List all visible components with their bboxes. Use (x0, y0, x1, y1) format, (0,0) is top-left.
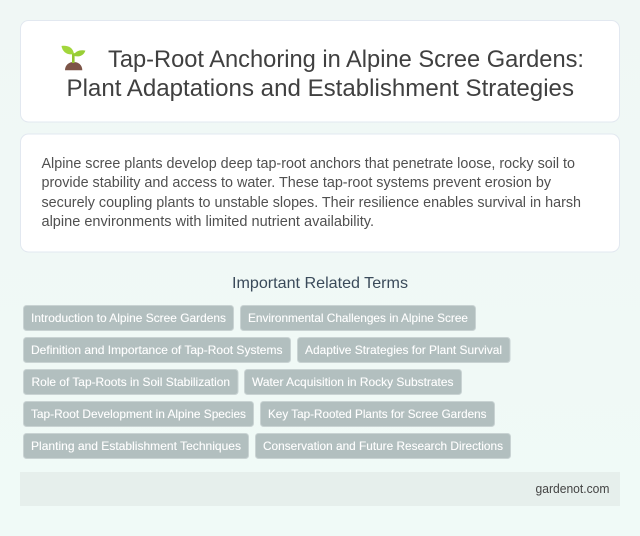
icon: seedling (62, 46, 85, 70)
chip: introduction: Introduction to Alpine Scree Gardens (31, 311, 226, 325)
chip: adaptive strategies: Adaptive Strategies for Plant Survival (305, 343, 502, 357)
chip: key plants (260, 402, 494, 426)
chip: key plants: Key Tap-Rooted Plants for Scree Gardens (268, 407, 486, 421)
chip: planting techniques (24, 434, 248, 458)
heading: important related terms: Important Related Terms (232, 275, 408, 292)
chip: environmental challenges: Environmental Challenges in Alpine Scree (248, 311, 468, 325)
chip: conservation: Conservation and Future Research Directions (263, 439, 503, 453)
chip: definition (24, 338, 290, 362)
title: Tap-Root Anchoring in Alpine Scree Gardens: (108, 46, 584, 73)
panel: description card (20, 134, 620, 252)
description text: alpine environments with limited nutrient availability. (42, 214, 374, 230)
chip: adaptive strategies (298, 338, 510, 362)
chip: water acquisition (244, 370, 462, 394)
chip: conservation (256, 434, 510, 458)
footer bar (20, 472, 620, 506)
title (66, 46, 584, 102)
chip: environmental challenges (240, 306, 476, 330)
description text: provide stability and access to water. These tap-root systems prevent erosion by (42, 175, 552, 191)
footer site name: gardenot.com (536, 481, 610, 496)
chip: water acquisition: Water Acquisition in Rocky Substrates (252, 375, 454, 389)
chip: planting techniques: Planting and Establishment Techniques (31, 439, 241, 453)
panel: related term chips (24, 306, 510, 458)
chip: soil stabilization (24, 370, 238, 394)
chip: definition: Definition and Importance of Tap-Root Systems (31, 343, 282, 357)
description text: securely coupling plants to unstable slopes. Their resilience enables survival in harsh (42, 195, 581, 211)
chip: tap-root development: Tap-Root Development in Alpine Species (31, 407, 246, 421)
chip: soil stabilization: Role of Tap-Roots in Soil Stabilization (32, 375, 230, 389)
description text: Alpine scree plants develop deep tap-root anchors that penetrate loose, rocky soil to (42, 156, 575, 172)
description text (42, 156, 581, 230)
panel: title card (20, 20, 620, 122)
chip: tap-root development (24, 402, 254, 426)
chip: introduction (24, 306, 234, 330)
title: Plant Adaptations and Establishment Strategies (66, 75, 574, 102)
